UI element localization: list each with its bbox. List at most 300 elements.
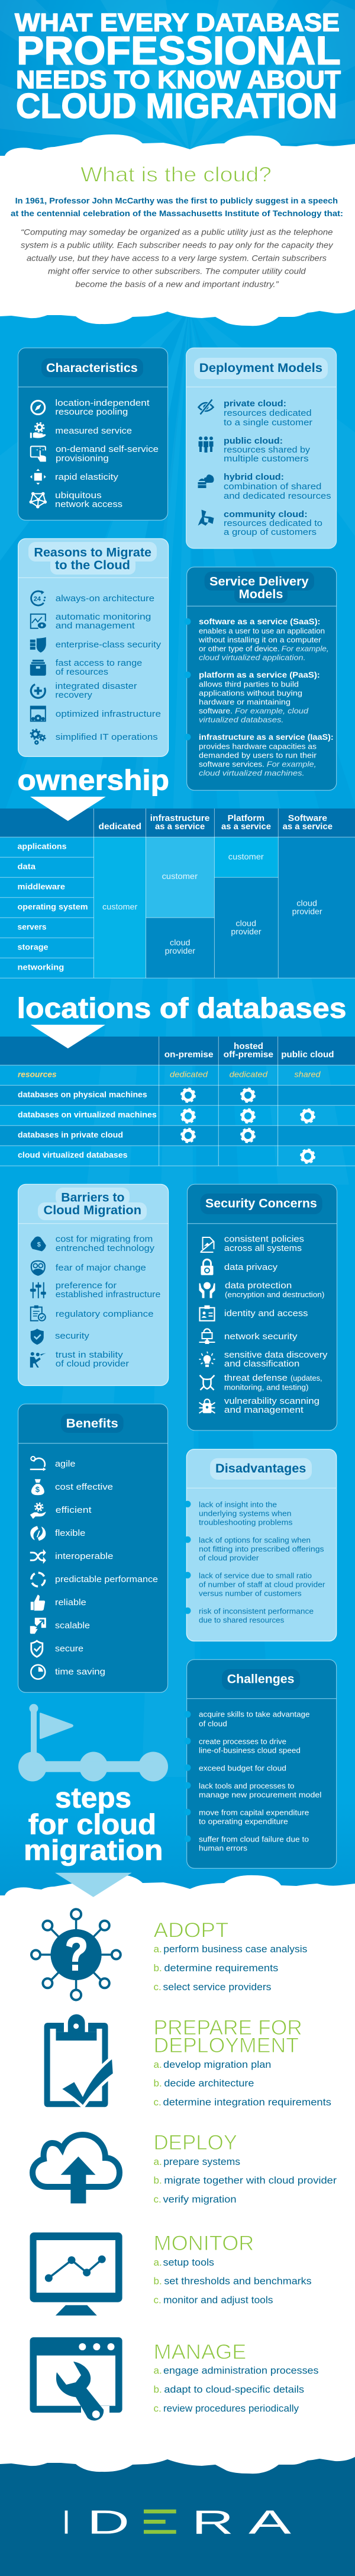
item: network access: network access [55, 499, 122, 509]
row labels [18, 1089, 157, 1159]
step: adopt [31, 1909, 307, 2000]
cell labels: customer [162, 871, 198, 881]
column headers: off-premise [224, 1050, 273, 1060]
item: efficient: efficient [56, 1505, 92, 1515]
item: public cloud: public cloud: [224, 436, 283, 446]
item: fast access: of resources [56, 667, 108, 677]
icon: window wrench [30, 2337, 122, 2421]
item: lack tools: manage new procurement model [199, 1790, 322, 1799]
item: automatic monitoring: automatic monitoring [56, 612, 151, 622]
item: trust: trust in stability [56, 1350, 123, 1360]
item: disaster recovery: integrated disaster [55, 681, 137, 691]
step: deploy [33, 2131, 337, 2205]
column headers: as a service [221, 822, 271, 832]
item: fear: fear of major change [56, 1263, 146, 1273]
list: manage: review procedures periodically [163, 2403, 299, 2414]
panel: reasons to migrate [18, 538, 169, 756]
item: identity and access: identity and access [224, 1308, 308, 1319]
heading: steps for cloud migration: migration [24, 1835, 163, 1866]
row: resources: shared [295, 1069, 321, 1079]
item: community cloud: a group of customers [224, 527, 317, 537]
item: cost: entrenched technology [56, 1243, 155, 1253]
column headers: infrastructure [150, 813, 209, 823]
item: lack of service [185, 1571, 325, 1597]
heading: locations of databases: locations of databases [17, 993, 346, 1024]
item: private cloud [199, 399, 312, 428]
column headers: Software [288, 813, 327, 823]
item: inconsistent performance [185, 1606, 314, 1624]
row labels: databases on virtualized machines [18, 1109, 157, 1119]
item: simplified operations [31, 730, 158, 744]
item: inconsistent performance: risk of inconsistent performance [199, 1606, 314, 1615]
item: flexible [30, 1526, 85, 1541]
list: prepare: c. [154, 2097, 162, 2108]
row: resources: dedicated [170, 1069, 208, 1079]
item: paas: platform as a service (PaaS): [199, 670, 320, 679]
step: prepare for deployment [44, 2014, 331, 2108]
item: hybrid cloud: combination of shared [224, 482, 321, 492]
list: monitor: set thresholds and benchmarks [164, 2276, 312, 2287]
item: saas: or other type of device. [199, 644, 280, 653]
item: public cloud: resources shared by [224, 445, 311, 455]
item: preference: preference for [56, 1281, 117, 1291]
item: interoperable: interoperable [55, 1551, 113, 1561]
item: sensitive data discovery [199, 1350, 328, 1369]
item: capital expenditure [185, 1808, 309, 1826]
item: paas: applications without buying [199, 689, 302, 698]
item: trust [30, 1350, 129, 1369]
item: capital expenditure: to operating expenditure [199, 1817, 288, 1826]
list: prepare: develop migration plan [163, 2059, 271, 2070]
panel: barriers to cloud migration [18, 1184, 169, 1385]
item: create processes: line-of-business cloud speed [199, 1746, 301, 1754]
heading: prepare for deployment [154, 2016, 302, 2057]
panel: deployment models [186, 348, 337, 548]
heading: adopt: ADOPT [154, 1919, 228, 1942]
item: threat defense: monitoring, and testing) [224, 1383, 309, 1391]
heading: security concerns: Security Concerns [205, 1196, 317, 1210]
item: community cloud: resources dedicated to [224, 518, 322, 528]
panel: security concerns [187, 1184, 337, 1430]
heading: prepare for deployment: DEPLOYMENT [154, 2034, 299, 2057]
intro text: at the centennial celebration of the Massachusetts Institute of Technology that: [11, 208, 343, 218]
logo: idera: A [248, 2504, 291, 2542]
item: hybrid cloud [198, 472, 331, 501]
item: hybrid cloud: hybrid cloud: [224, 472, 284, 482]
row labels: operating system [18, 902, 88, 911]
item: saas: enables a user to use an application [199, 627, 325, 636]
heading: reasons to migrate: to the Cloud [55, 559, 130, 572]
panel: challenges [185, 1660, 337, 1868]
item: security [31, 1329, 89, 1345]
item: capital expenditure: move from capital expenditure [199, 1808, 309, 1817]
item: secure [31, 1641, 83, 1657]
column headers: public cloud [281, 1050, 334, 1060]
item: lack of insight: underlying systems when [199, 1509, 291, 1518]
item: lack of insight: lack of insight into the [199, 1500, 277, 1509]
title: PROFESSIONAL [17, 28, 341, 73]
item: cost effective: $ [36, 1485, 40, 1494]
step: manage [30, 2337, 318, 2421]
list: manage: b. [154, 2384, 162, 2395]
item: lack of options: not fitting into prescribed offerings [199, 1544, 324, 1553]
quote: system is a public utility. Each subscriber needs to pay only for the capacity they [21, 240, 334, 250]
item: iaas: provides hardware capacities as [199, 742, 317, 751]
item: identity and access [200, 1305, 308, 1321]
list: monitor: c. [154, 2295, 162, 2306]
list: prepare [154, 2059, 331, 2108]
item: sensitive data discovery: sensitive data discovery [224, 1350, 328, 1360]
item: interoperable [30, 1549, 113, 1564]
item: iaas: software services. [199, 760, 264, 769]
quote: might offer service to other subscribers. The computer utility could [48, 267, 306, 276]
item: iaas: infrastructure as a service (IaaS): [199, 732, 334, 742]
list: adopt [154, 1943, 307, 1993]
item: security: security [55, 1331, 89, 1341]
item: regulatory compliance: regulatory compliance [56, 1309, 154, 1319]
item: iaas: For example, [267, 760, 317, 769]
item: time saving [31, 1665, 105, 1679]
logo: idera [62, 2504, 291, 2542]
item: agile: agile [55, 1459, 75, 1469]
list: prepare: a. [154, 2059, 162, 2070]
icon: monitor chart [30, 2232, 122, 2315]
item: lack of service: lack of service due to small ratio [199, 1571, 312, 1580]
item: regulatory compliance [31, 1305, 153, 1321]
heading: service delivery models [209, 575, 309, 601]
item: predictable performance [31, 1573, 158, 1586]
item: always-on [31, 591, 154, 605]
panel: characteristics [18, 348, 168, 520]
item: hybrid cloud: and dedicated resources [224, 491, 331, 501]
item: rapid elasticity: rapid elasticity [55, 472, 118, 482]
icon: question hub [31, 1909, 121, 2000]
heading: service delivery models: Service Delivery [209, 575, 309, 588]
list: manage [154, 2365, 318, 2414]
item: efficient [30, 1503, 92, 1519]
item: paas: allows third parties to build [199, 680, 299, 689]
item: simplified operations: simplified IT operations [56, 732, 158, 742]
row labels: data [18, 861, 36, 871]
heading: disadvantages: Disadvantages [215, 1462, 306, 1475]
list: adopt: perform business case analysis [163, 1943, 307, 1955]
item: lack of insight: troubleshooting problems [199, 1518, 293, 1526]
item: private cloud: to a single customer [224, 418, 312, 428]
item: paas [185, 670, 320, 724]
list: deploy: verify migration [163, 2194, 237, 2205]
list: prepare: b. [154, 2078, 162, 2089]
icon: steps flag and track [18, 1704, 168, 1782]
item: acquire skills: acquire skills to take advantage [199, 1709, 310, 1718]
heading: barriers: Barriers to [61, 1191, 124, 1204]
item: create processes [185, 1737, 301, 1754]
list: monitor: setup tools [163, 2257, 214, 2268]
item: consistent policies: consistent policies [224, 1234, 304, 1244]
item: paas: For example, cloud [235, 707, 309, 716]
cell labels: provider [165, 946, 195, 955]
panel: service delivery models [185, 567, 337, 790]
cell labels: customer [228, 852, 264, 861]
list: monitor: monitor and adjust tools [163, 2295, 273, 2306]
item: lack of options: of cloud provider [199, 1553, 259, 1562]
item: resource pooling: location-independent [55, 398, 150, 408]
list: monitor: b. [154, 2276, 162, 2287]
logo: idera: R [192, 2504, 234, 2542]
item: lack of service: of number of staff at cloud provider [199, 1580, 325, 1589]
heading: steps for cloud migration [24, 1783, 163, 1866]
item: lack of options [185, 1535, 324, 1562]
lower white cloud background [0, 1874, 355, 2488]
item: preference: established infrastructure [56, 1289, 160, 1300]
item: self-service provisioning: provisioning [56, 453, 109, 463]
item: optimized infrastructure [30, 706, 161, 721]
heading: manage: MANAGE [154, 2340, 246, 2363]
arrow: steps [55, 1873, 132, 1897]
item: enterprise-class security [30, 637, 162, 653]
list: prepare: determine integration requirements [163, 2097, 331, 2108]
item: scalable: scalable [55, 1621, 90, 1631]
item: resource pooling: resource pooling [55, 407, 128, 417]
item: threat defense: (updates, [291, 1374, 322, 1382]
cloud band: what is the cloud background [0, 134, 355, 326]
item: iaas [185, 732, 334, 778]
list: deploy: prepare systems [163, 2156, 240, 2167]
item: threat defense: threat defense [224, 1373, 288, 1383]
item: data privacy [201, 1259, 278, 1275]
list: prepare: decide architecture [164, 2078, 254, 2089]
title: WHAT EVERY DATABASE [15, 8, 340, 37]
row labels: cloud virtualized databases [18, 1150, 128, 1159]
item: consistent policies [200, 1234, 304, 1253]
item: predictable performance: predictable performance [55, 1574, 158, 1584]
item: measured service: measured service [55, 426, 132, 436]
list: deploy: migrate together with cloud provider [164, 2175, 337, 2186]
column headers: Platform [228, 813, 264, 823]
title: CLOUD MIGRATION [16, 86, 337, 126]
row: resources [18, 1069, 321, 1079]
item: cost [31, 1234, 155, 1253]
list: manage: adapt to cloud-specific details [164, 2384, 304, 2395]
cell labels: customer [102, 902, 138, 912]
heading: ownership: ownership [18, 765, 169, 796]
item: saas: cloud virtualized application. [199, 653, 306, 662]
item: threat defense [200, 1373, 322, 1391]
arrow: ownership [30, 797, 106, 821]
heading: barriers [44, 1191, 141, 1217]
list: adopt: select service providers [163, 1981, 271, 1993]
step: monitor [30, 2232, 312, 2315]
item: saas: without installing it on a computer [198, 636, 321, 644]
item: paas: hardware or maintaining [199, 698, 291, 707]
item: measured service [30, 423, 132, 438]
list: adopt: c. [154, 1981, 162, 1993]
item: network access [30, 490, 122, 509]
panel: disadvantages [185, 1449, 337, 1641]
item: data protection [199, 1281, 324, 1299]
quote [21, 227, 334, 289]
column headers: dedicated [98, 822, 141, 832]
item: fear [31, 1261, 146, 1275]
item: enterprise-class security: enterprise-class security [56, 640, 162, 650]
heading: prepare for deployment: PREPARE FOR [154, 2016, 302, 2039]
item: self-service provisioning: on-demand self-service [56, 444, 159, 454]
item: iaas: demanded by users to run their [199, 751, 317, 760]
item: self-service provisioning [31, 444, 159, 463]
list: monitor [154, 2257, 312, 2306]
list: deploy: a. [154, 2156, 162, 2167]
panel: benefits [18, 1404, 168, 1692]
item: network access: ubiquitous [55, 490, 102, 501]
item: fast access: fast access to range [56, 658, 142, 668]
item: acquire skills: of cloud [199, 1719, 227, 1728]
cell labels: cloud [170, 938, 191, 947]
heading: steps for cloud migration: for cloud [28, 1810, 156, 1841]
cell labels: provider [292, 906, 322, 916]
item: inconsistent performance: due to shared resources [199, 1615, 285, 1624]
item: saas: For example, [282, 644, 329, 653]
item: network security: network security [224, 1332, 298, 1342]
column headers [98, 813, 333, 832]
row labels: applications [18, 841, 67, 851]
heading: reasons to migrate: Reasons to Migrate [34, 546, 151, 559]
intro text: In 1961, Professor John McCarthy was the first to publicly suggest in a speech [15, 195, 338, 205]
list: deploy: c. [154, 2194, 162, 2205]
item: disaster recovery: recovery [55, 690, 92, 700]
heading: barriers: Cloud Migration [44, 1204, 141, 1217]
item: disaster recovery [29, 681, 137, 700]
item: sensitive data discovery: and classification [224, 1359, 299, 1369]
item: automatic monitoring: and management [56, 621, 135, 631]
quote: actually use, but they have access to a very large system. Certain subscribers [27, 254, 327, 263]
item: exceed budget: exceed budget for cloud [199, 1763, 286, 1772]
item: public cloud [199, 436, 311, 464]
item: cost: cost for migrating from [56, 1234, 153, 1244]
item: lack of service: versus number of customers [199, 1589, 302, 1597]
column headers: as a service [155, 822, 205, 832]
heading: what is the cloud: What is the cloud? [80, 163, 272, 187]
list: monitor: a. [154, 2257, 162, 2268]
column headers: as a service [283, 822, 333, 832]
heading: characteristics: Characteristics [46, 361, 138, 375]
item: cost effective: cost effective [55, 1482, 113, 1492]
column headers: on-premise [164, 1050, 213, 1060]
item: reliable [31, 1595, 86, 1611]
item: secure: secure [55, 1644, 83, 1654]
heading: benefits: Benefits [66, 1417, 118, 1430]
title: NEEDS TO KNOW ABOUT [16, 66, 341, 94]
quote: “Computing may someday be organized as a public utility just as the telephone [21, 227, 333, 237]
item: reliable: reliable [55, 1597, 86, 1608]
row labels: databases on physical machines [18, 1089, 147, 1099]
cell labels [102, 852, 322, 955]
item: data privacy: data privacy [224, 1262, 278, 1272]
heading: steps for cloud migration: steps [55, 1783, 131, 1814]
list: deploy: b. [154, 2175, 162, 2186]
row labels: networking [18, 962, 64, 971]
heading: service delivery models: Models [239, 588, 283, 601]
table: locations of databases [0, 1037, 355, 1166]
item: saas [185, 617, 329, 662]
list: manage: c. [154, 2403, 162, 2414]
list: adopt: a. [154, 1943, 162, 1955]
title [15, 8, 341, 126]
cell labels: cloud [296, 898, 317, 907]
list: deploy [154, 2156, 337, 2205]
item: cloud failure: suffer from cloud failure due to [199, 1834, 309, 1843]
item: acquire skills [185, 1709, 310, 1728]
item: paas: software. [199, 707, 233, 716]
logo: idera: D [87, 2504, 130, 2542]
column headers [164, 1041, 334, 1060]
arrow: locations [31, 1025, 105, 1048]
item: data protection: (encryption and destruction) [225, 1291, 324, 1299]
icon: cloud upload [33, 2135, 120, 2203]
item: lack tools: lack tools and processes to [199, 1781, 295, 1790]
row labels: servers [18, 922, 47, 931]
row labels: databases in private cloud [18, 1130, 123, 1139]
heading: challenges: Challenges [227, 1673, 295, 1686]
item: saas: software as a service (SaaS): [199, 617, 321, 626]
item: private cloud: resources dedicated [224, 408, 312, 418]
item: create processes: create processes to drive [199, 1737, 286, 1746]
item: vulnerability scanning: vulnerability scanning [224, 1396, 320, 1406]
row: resources: resources [18, 1069, 57, 1079]
item: trust: of cloud provider [56, 1359, 129, 1369]
gear markers [181, 1089, 315, 1163]
item: cost effective [31, 1479, 113, 1495]
list: manage: engage administration processes [163, 2365, 318, 2376]
heading: deploy: DEPLOY [154, 2131, 237, 2154]
item: vulnerability scanning: and management [224, 1405, 304, 1415]
list: manage: a. [154, 2365, 162, 2376]
item: preference [30, 1281, 160, 1300]
item: community cloud: community cloud: [224, 509, 308, 519]
item: fast access [30, 658, 142, 677]
item: lack tools [185, 1781, 322, 1799]
item: public cloud: multiple customers [224, 454, 309, 464]
heading: monitor: MONITOR [154, 2232, 254, 2255]
item: time saving: time saving [55, 1667, 105, 1677]
item: cloud failure: human errors [199, 1843, 248, 1852]
item: scalable [30, 1618, 90, 1634]
item: network security [199, 1329, 298, 1344]
quote: become the basis of a new and important industry.” [75, 280, 279, 289]
row: resources: dedicated [230, 1069, 268, 1079]
cell labels: cloud [235, 918, 256, 928]
row labels: storage [18, 942, 49, 951]
list: adopt: b. [154, 1962, 162, 1974]
item: iaas: cloud virtualized machines. [199, 769, 305, 778]
item: agile [30, 1457, 75, 1471]
footer background [0, 2452, 355, 2576]
table: ownership [0, 809, 355, 978]
cell labels: provider [231, 926, 262, 936]
list: adopt: determine requirements [164, 1962, 278, 1974]
item: resource pooling [31, 398, 150, 417]
item: lack of insight [185, 1500, 293, 1526]
item: cloud failure [185, 1834, 309, 1852]
item: private cloud: private cloud: [224, 399, 286, 409]
item: flexible: flexible [55, 1528, 85, 1538]
item: consistent policies: across all systems [224, 1243, 302, 1253]
item: always-on: 24 [34, 595, 41, 602]
item: automatic monitoring [31, 612, 151, 631]
heading: deployment models: Deployment Models [199, 361, 322, 375]
item: community cloud [198, 509, 322, 537]
column headers: hosted [234, 1041, 263, 1051]
item: cost: $ [37, 1242, 41, 1249]
row labels: middleware [18, 881, 65, 891]
